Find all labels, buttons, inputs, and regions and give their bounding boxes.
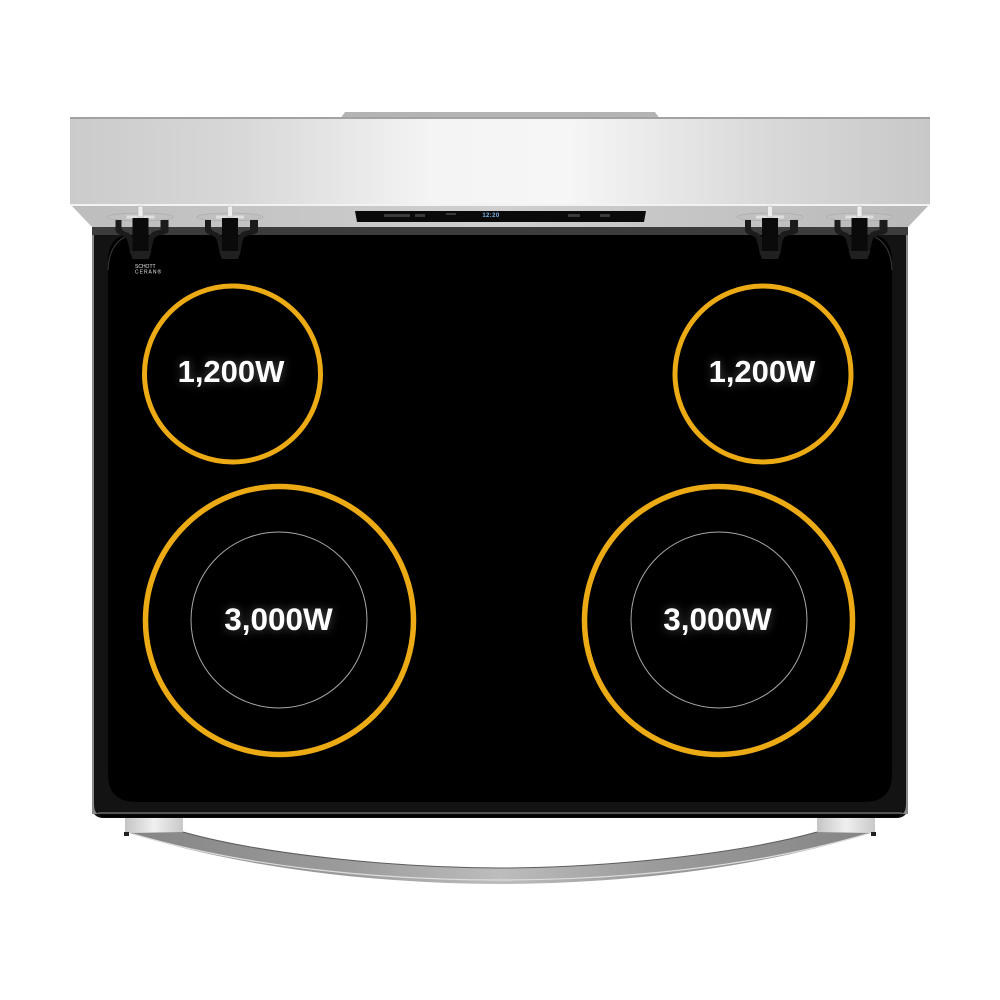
wattage label: 3,000W [663, 601, 772, 637]
wattage label: 1,200W [709, 354, 816, 389]
burner: rear left [144, 286, 320, 462]
handle bar [130, 832, 870, 884]
burner: rear left: 1,200W [178, 354, 285, 389]
hinge 2 [197, 206, 263, 259]
front panel [70, 118, 930, 205]
hinge 1 [108, 206, 174, 259]
logo: Schott Ceran: SCHOTT [135, 264, 156, 270]
wattage label: 1,200W [178, 354, 285, 389]
burner: front right [584, 486, 852, 754]
raised rear strip [340, 112, 660, 119]
logo: Schott Ceran [135, 264, 162, 276]
cooking surface [108, 235, 892, 802]
lower angled band [70, 204, 930, 227]
handle [124, 818, 876, 884]
burner: front left [146, 486, 414, 754]
display strip [355, 211, 646, 222]
burner: front left: 3,000W [224, 601, 333, 637]
hinge 4 [826, 206, 892, 259]
handle posts [124, 818, 876, 836]
burner: front right: 3,000W [663, 601, 772, 637]
logo: Schott Ceran: CERAN® [135, 268, 162, 276]
wattage label: 3,000W [224, 601, 333, 637]
hinge 3 [737, 206, 803, 259]
burner: rear right: 1,200W [709, 354, 816, 389]
hinges [108, 206, 892, 259]
burner: rear right [675, 286, 851, 462]
control panel [70, 112, 930, 235]
clock readout: 12:20 [482, 213, 500, 219]
cooktop glass [92, 222, 908, 818]
